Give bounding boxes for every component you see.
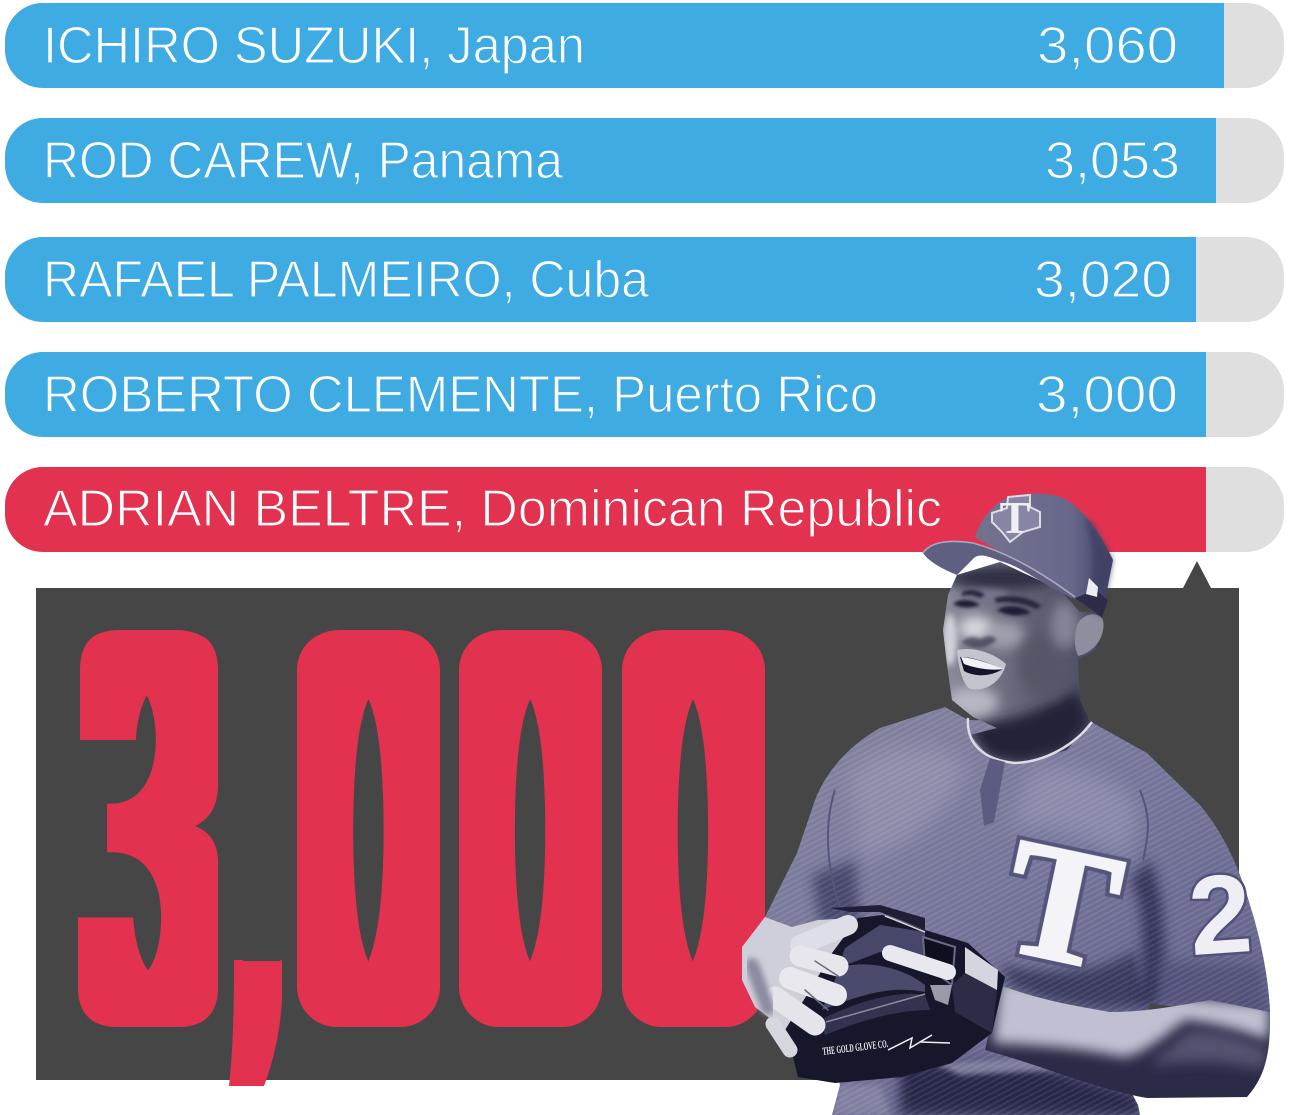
- panel: dark background with pointer: [36, 561, 1239, 1080]
- bar: Roberto Clemente 3,000: [5, 352, 1284, 437]
- bar: Adrian Beltre highlighted: ADRIAN BELTRE, Dominican Republic: [43, 480, 942, 538]
- bar: Rafael Palmeiro 3,020: RAFAEL PALMEIRO, Cuba: [43, 251, 649, 309]
- photo: Adrian Beltre illustration: [742, 492, 1270, 1115]
- jersey logo T: T: [989, 803, 1135, 1006]
- sleeve number 2: 2: [1185, 850, 1256, 979]
- bar: Ichiro Suzuki 3,060: 3,060: [1037, 17, 1178, 75]
- bar: Rod Carew 3,053: [5, 118, 1284, 203]
- bar: Rod Carew 3,053: ROD CAREW, Panama: [43, 132, 563, 190]
- ear: [1075, 614, 1103, 656]
- cap: T: [1000, 492, 1030, 543]
- glove: [785, 905, 1005, 1083]
- glove: THE GOLD GLOVE CO.: [822, 1038, 889, 1058]
- right forearm: [985, 980, 1270, 1098]
- bar: Roberto Clemente 3,000: 3,000: [1036, 366, 1178, 424]
- face features: [953, 590, 1042, 689]
- jersey placket: [980, 758, 1005, 826]
- jersey body: [765, 707, 1270, 1115]
- bar: Rafael Palmeiro 3,020: [5, 237, 1284, 322]
- bar: Roberto Clemente 3,000: ROBERTO CLEMENTE, Puerto Rico: [43, 366, 878, 424]
- bar: Ichiro Suzuki 3,060: ICHIRO SUZUKI, Japan: [43, 17, 585, 75]
- cap: [923, 492, 1113, 617]
- bar: Adrian Beltre highlighted: [5, 467, 1284, 552]
- bar: Rod Carew 3,053: 3,053: [1045, 132, 1180, 190]
- collar: [968, 718, 1092, 763]
- bar: Ichiro Suzuki 3,060: [5, 3, 1284, 88]
- left arm and hand base: [742, 917, 855, 1053]
- bar: Rafael Palmeiro 3,020: 3,020: [1034, 251, 1172, 309]
- hands: [752, 925, 948, 1050]
- neck and face: [943, 562, 1104, 763]
